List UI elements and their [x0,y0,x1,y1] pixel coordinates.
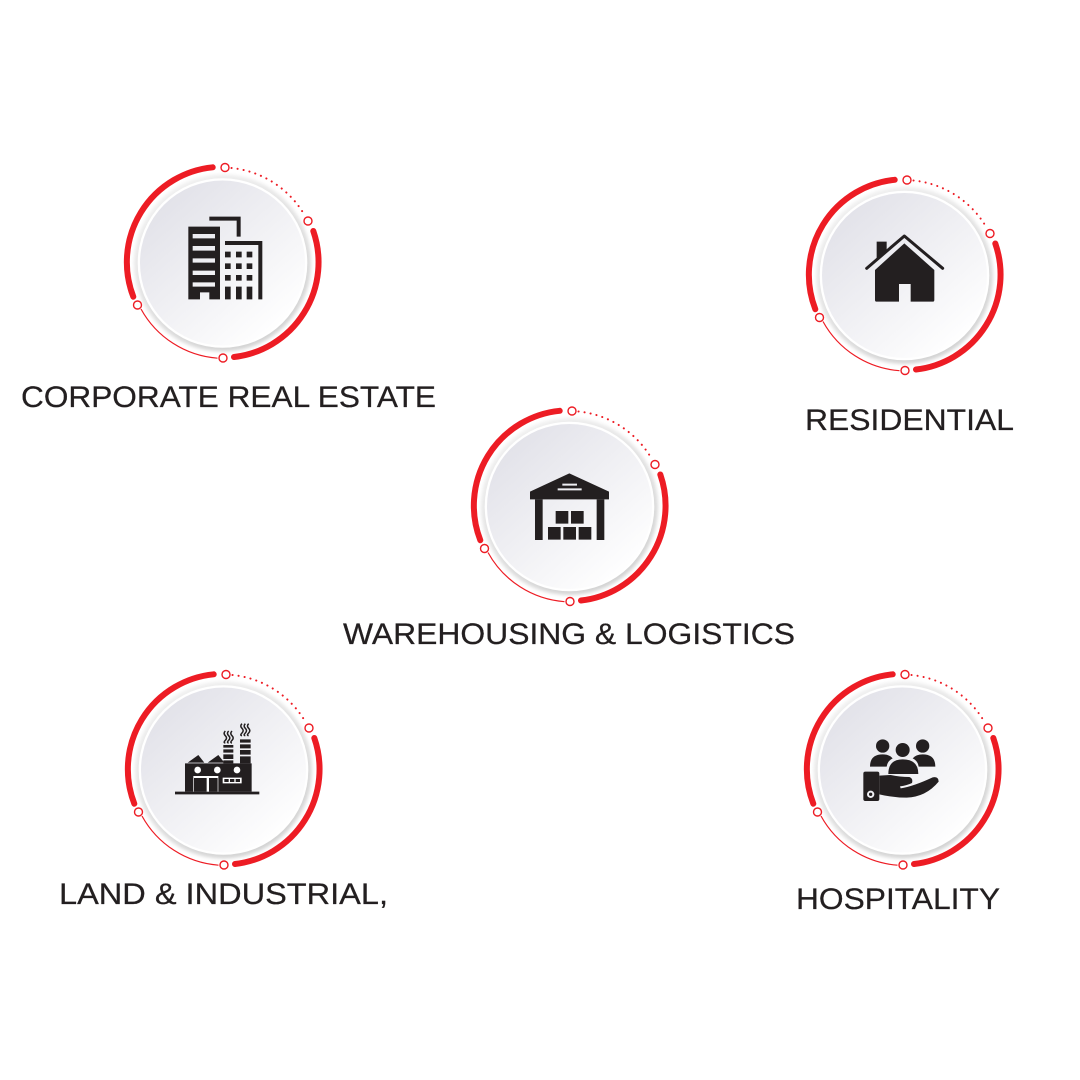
panel: hospitality [796,670,1000,916]
ring: warehousing [474,407,666,606]
label: land and industrial: LAND & INDUSTRIAL, [59,878,388,911]
icon: office buildings [188,217,262,299]
panel: residential [805,176,1014,437]
label: warehousing and logistics: WAREHOUSING & LOGISTICS [343,618,795,651]
panel: land and industrial [59,670,388,911]
label: corporate real estate: CORPORATE REAL ESTATE [21,381,436,414]
label: residential: RESIDENTIAL [805,404,1014,437]
icon: warehouse [530,473,609,540]
panel: corporate real estate [21,164,436,414]
icon: house [867,236,943,302]
ring: hospitality [807,670,999,869]
panel: warehousing and logistics [343,407,795,651]
ring: residential [809,176,1001,374]
icon: people in hand [863,739,939,801]
ring: land and industrial [128,670,320,869]
ring: corporate real estate [127,164,319,362]
label: hospitality: HOSPITALITY [796,883,1000,916]
icon: factory [175,724,259,794]
